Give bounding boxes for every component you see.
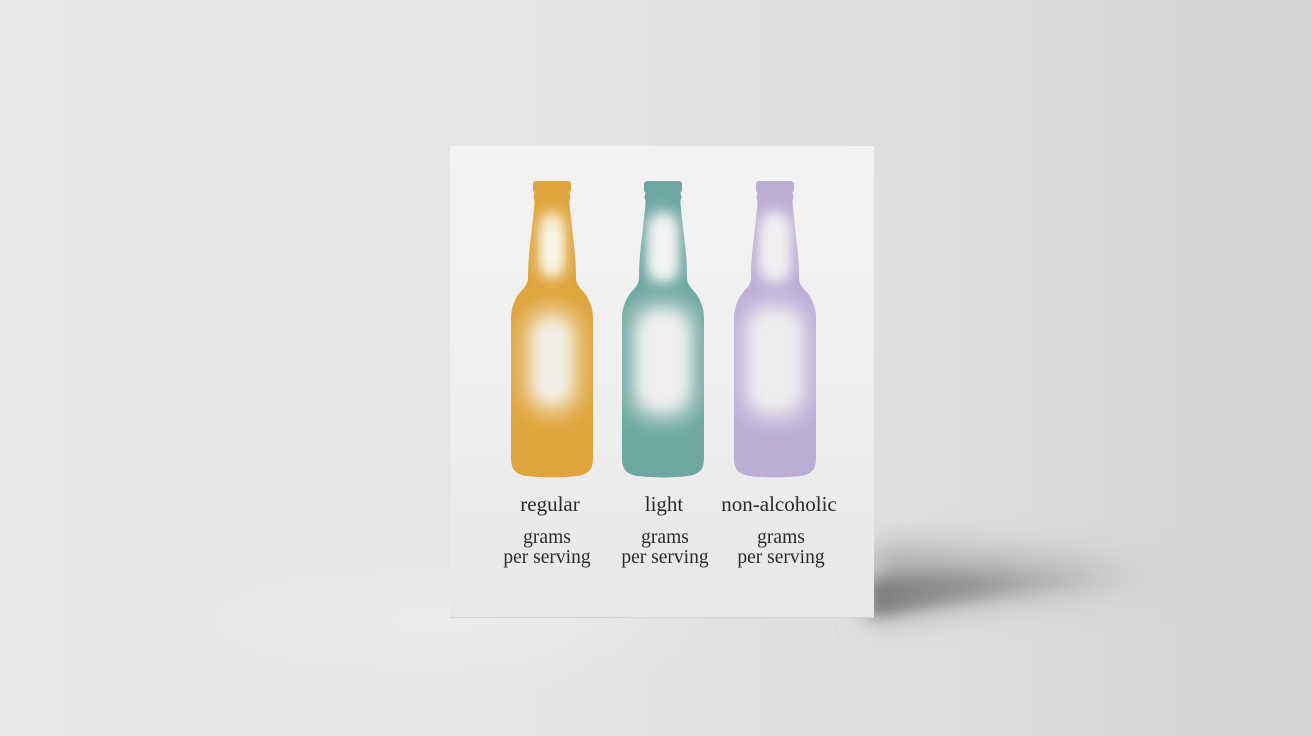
label: light: [621, 492, 709, 568]
bottle: regular: [511, 181, 593, 478]
label: regular: regular: [520, 492, 580, 516]
bottle: non-alcoholic: [734, 181, 816, 478]
label: non-alcoholic: non-alcoholic: [721, 492, 837, 516]
card: [450, 146, 874, 618]
card shadow: [870, 548, 1210, 622]
bottle: light: [622, 181, 704, 478]
label: light: light: [645, 492, 683, 516]
label: regular: [503, 492, 591, 568]
label: regular: per serving: [503, 547, 591, 568]
label: non-alcoholic: [721, 492, 837, 568]
label: light: per serving: [621, 547, 709, 568]
label: non-alcoholic: grams: [757, 527, 805, 548]
label: regular: grams: [523, 527, 571, 548]
label: non-alcoholic: per serving: [737, 547, 825, 568]
label: light: grams: [641, 527, 689, 548]
